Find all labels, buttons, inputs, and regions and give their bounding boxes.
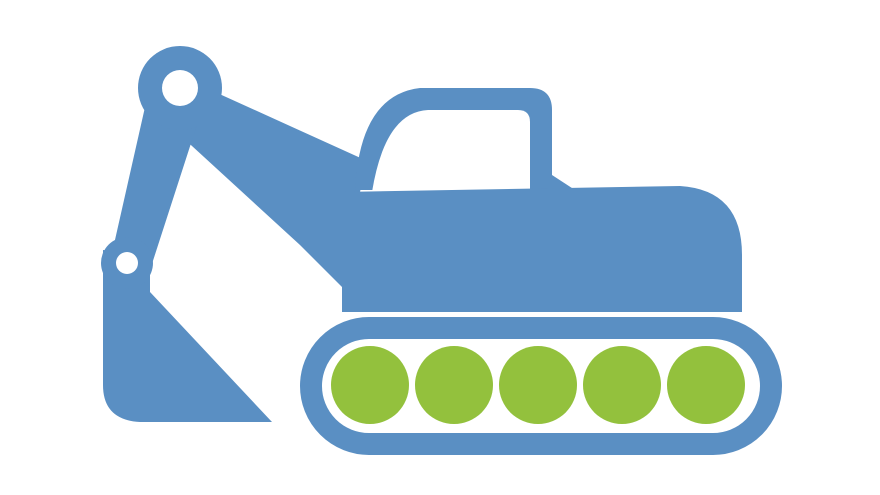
- top pivot joint: [138, 46, 222, 130]
- track wheels: [331, 346, 745, 424]
- boom arm: [150, 70, 365, 290]
- stick arm: [110, 85, 205, 270]
- bucket: [103, 250, 272, 422]
- bucket pivot joint: [101, 237, 153, 289]
- body: [342, 186, 742, 312]
- icon: excavator: [101, 46, 771, 444]
- cab: [355, 88, 575, 192]
- track: [311, 328, 771, 444]
